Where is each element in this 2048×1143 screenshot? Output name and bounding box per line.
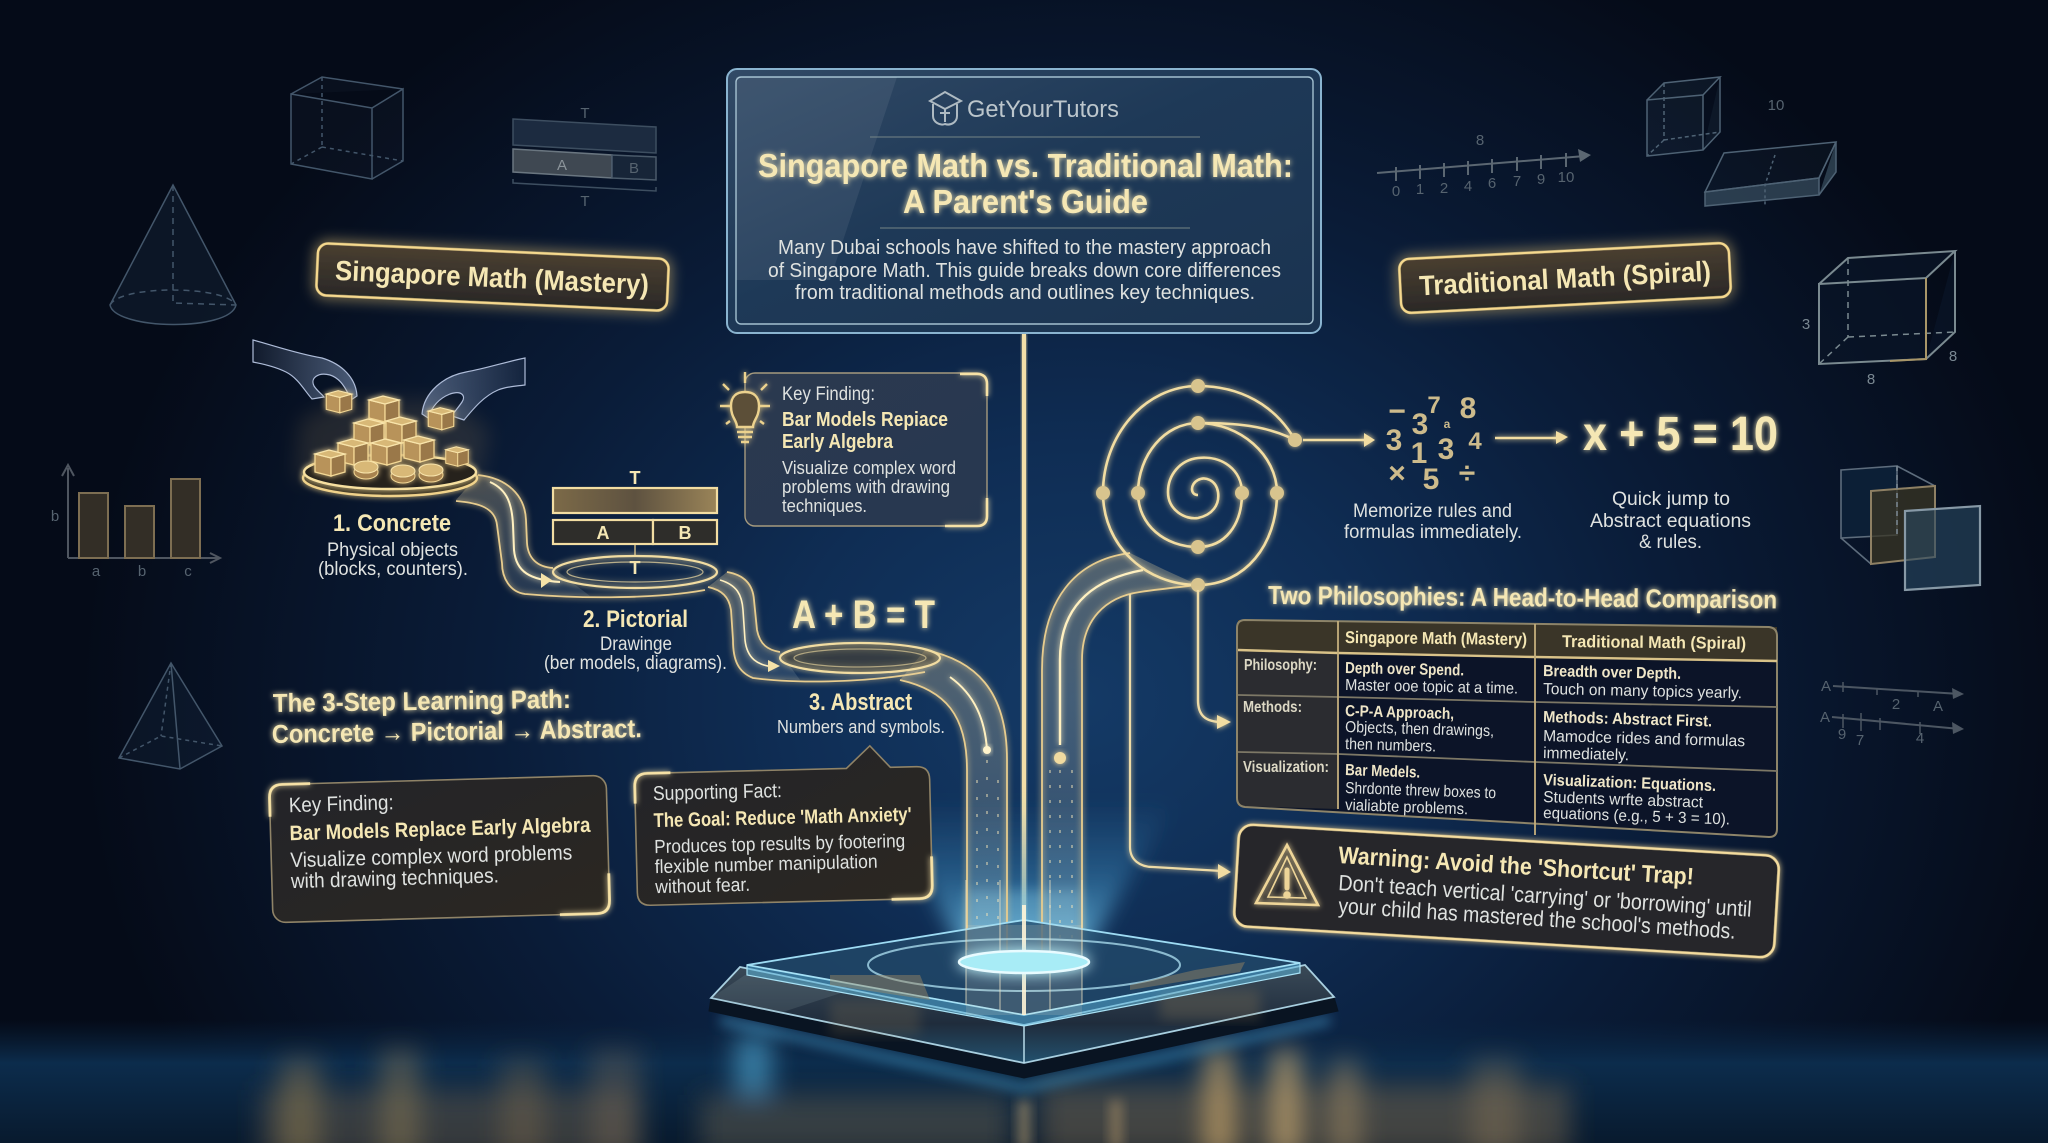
spiral tube	[1042, 553, 1198, 950]
icon: scattered numbers: ×	[1388, 457, 1406, 490]
decoration: big wireframe box right: 3	[1802, 316, 1810, 333]
icon: scattered numbers: 1	[1411, 437, 1427, 470]
table column: Traditional	[1543, 663, 1745, 829]
decoration: number lines right: A	[1820, 709, 1830, 726]
table header: Singapore Math (Mastery)	[1345, 628, 1527, 649]
icon: scattered numbers: a	[1444, 417, 1451, 431]
table column: Singapore: Master ooe topic at a time.	[1345, 677, 1518, 698]
decoration: number lines right	[1820, 678, 1964, 749]
icon: scattered numbers: 4	[1468, 428, 1482, 455]
decoration: big wireframe box right: 8	[1867, 371, 1875, 388]
decoration: number lines right: A	[1933, 698, 1943, 715]
caption: memorize rules: formulas immediately.	[1344, 522, 1522, 543]
decoration: number line: 9	[1537, 171, 1545, 188]
decoration: faint bar model: T	[580, 193, 590, 210]
learning path tube 2	[708, 572, 925, 682]
decoration: faint bar model: T	[580, 105, 590, 122]
caption: quick jump	[1590, 489, 1751, 553]
icon: hands and blocks	[253, 340, 525, 496]
callout: key finding bottom: Key Finding:	[288, 791, 394, 817]
table column: Singapore	[1345, 660, 1518, 818]
decoration: number line: 7	[1513, 173, 1521, 190]
caption: memorize rules: Memorize rules and	[1353, 501, 1512, 522]
label: Traditional Math	[1399, 243, 1731, 313]
logo wordmark: GetYourTutors	[967, 96, 1119, 123]
decoration: number line: 1	[1416, 181, 1424, 198]
table row labels: Methods:	[1243, 699, 1302, 716]
table row labels: Visualization:	[1243, 759, 1329, 776]
step 3: Abstract: 3. Abstract	[809, 689, 912, 716]
disc: pictorial	[553, 556, 717, 588]
decoration: bar chart: b	[51, 508, 59, 525]
warning text: your child has mastered the school's methods.	[1338, 893, 1736, 944]
intro text	[768, 237, 1281, 304]
central stem	[1022, 333, 1026, 973]
step 2: Pictorial: 2. Pictorial	[583, 606, 688, 633]
arrow: rules to equation	[1495, 431, 1568, 444]
heading: 3-step learning path: The 3-Step Learning Path:	[273, 684, 571, 718]
caption: quick jump: & rules.	[1639, 532, 1702, 553]
decoration: number line: 4	[1464, 178, 1472, 195]
warning box	[1233, 824, 1780, 958]
equation: x + 5 = 10: x + 5 = 10	[1583, 408, 1778, 461]
table header: Traditional Math (Spiral)	[1562, 632, 1746, 653]
icon: bar model	[553, 468, 717, 578]
icon: bar model: T	[630, 468, 640, 488]
decoration: pyramid	[119, 663, 222, 769]
table row labels: Philosophy:	[1244, 657, 1317, 674]
platform reflection	[720, 1020, 1330, 1088]
table column: Traditional: equations (e.g., 5 + 3 = 10).	[1543, 805, 1730, 829]
decoration: faint bar model: B	[629, 160, 639, 177]
table column: Traditional: Methods: Abstract First.	[1543, 709, 1712, 730]
disc: abstract	[780, 643, 940, 673]
table column: Traditional: immediately.	[1543, 745, 1629, 764]
caption: quick jump: Abstract equations	[1590, 511, 1751, 532]
decoration: overlapping squares	[1841, 466, 1980, 590]
decoration: number lines right: 7	[1856, 732, 1864, 749]
decoration: number line: 6	[1488, 175, 1496, 192]
icon: scattered numbers: 7	[1427, 392, 1441, 419]
table header	[1345, 628, 1746, 653]
callout: key finding top: Early Algebra	[782, 431, 894, 453]
icon: bar model: A	[596, 523, 610, 543]
icon: scattered numbers: ÷	[1459, 457, 1475, 490]
decoration: number lines right: 2	[1892, 696, 1900, 713]
callout: supporting fact: flexible number manipulation	[654, 852, 878, 878]
step 1: Concrete: (blocks, counters).	[318, 559, 468, 580]
callout: key finding bottom: Bar Models Replace Early Algebra	[289, 814, 591, 845]
decoration: wireframe boxes top right	[1647, 77, 1836, 206]
step 3: Abstract	[777, 689, 945, 737]
arrow: spiral to warning	[1130, 594, 1231, 879]
table column: Singapore: Depth over Spend.	[1345, 660, 1464, 679]
spiral	[1096, 379, 1302, 592]
callout: key finding top: techniques.	[782, 496, 867, 516]
icon: scattered numbers: 3	[1412, 408, 1428, 441]
step 3: Abstract: Numbers and symbols.	[777, 717, 945, 737]
table column: Traditional: Visualization: Equations.	[1543, 772, 1716, 795]
caption: memorize rules	[1344, 501, 1522, 543]
callout: key finding bottom: with drawing techniques.	[290, 864, 499, 893]
icon: light bulb	[720, 372, 770, 442]
icon: scattered numbers: 3	[1438, 433, 1454, 466]
title	[758, 147, 1293, 220]
heading: two philosophies: Two Philosophies: A Head-to-Head Comparison	[1268, 580, 1777, 614]
step 2: Pictorial: Drawinge	[600, 634, 672, 655]
decoration: number lines right: 4	[1916, 730, 1924, 747]
decoration: big wireframe box right: 8	[1949, 348, 1957, 365]
table column: Singapore: Bar Medels.	[1345, 762, 1420, 782]
table row labels	[1243, 657, 1329, 776]
decoration: number lines right: A	[1821, 678, 1831, 695]
learning path tube 3 down to base	[900, 650, 1007, 950]
caption: quick jump: Quick jump to	[1612, 489, 1730, 510]
comparison table	[1237, 620, 1777, 837]
callout: supporting fact	[634, 744, 933, 906]
intro text: Many Dubai schools have shifted to the mastery approach	[778, 237, 1271, 259]
icon: warning triangle	[1256, 845, 1318, 905]
warning text	[1338, 870, 1752, 944]
decoration: number line: 10	[1558, 169, 1574, 186]
label: Traditional Math: Traditional Math (Spiral)	[1418, 256, 1712, 301]
decoration: wireframe box top left	[291, 77, 403, 179]
table column: Singapore: vialiabte problems.	[1345, 797, 1468, 818]
equation: A + B = T: A + B = T	[792, 593, 935, 637]
heading: 3-step learning path: Concrete → Pictorial → Abstract.	[272, 713, 642, 749]
table column: Traditional: Students wrfte abstract	[1543, 789, 1704, 812]
intro text: of Singapore Math. This guide breaks down core differences	[768, 260, 1281, 282]
decoration: big wireframe box right	[1802, 251, 1957, 388]
table column: Traditional: Touch on many topics yearly.	[1543, 681, 1742, 702]
step 2: Pictorial	[544, 606, 727, 674]
decoration: number line	[1377, 132, 1591, 200]
step 1: Concrete: Physical objects	[327, 540, 458, 561]
icon: scattered numbers: 5	[1423, 463, 1439, 496]
title: Singapore Math vs. Traditional Math:	[758, 147, 1293, 184]
label: Singapore Math	[316, 243, 669, 311]
platform base	[709, 880, 1338, 1078]
decoration: bar chart: b	[138, 563, 146, 580]
arrow: spiral to table	[1198, 590, 1231, 729]
callout: supporting fact: The Goal: Reduce 'Math Anxiety'	[653, 804, 912, 832]
icon: scattered numbers: 8	[1460, 392, 1476, 425]
callout: supporting fact: Supporting Fact:	[653, 780, 782, 805]
icon: scattered numbers: 3	[1386, 424, 1402, 457]
callout: supporting fact: without fear.	[654, 875, 750, 898]
title: A Parent's Guide	[903, 183, 1148, 220]
warning text: Don't teach vertical 'carrying' or 'borrowing' until	[1338, 870, 1752, 922]
learning path tube 1	[456, 475, 705, 597]
arrow: spiral to rules	[1303, 433, 1375, 447]
callout: key finding top: Bar Models Repiace	[782, 409, 948, 431]
step 2: Pictorial: (ber models, diagrams).	[544, 653, 727, 674]
decoration: cone	[110, 185, 236, 325]
callout: key finding top: problems with drawing	[782, 477, 950, 497]
callout: key finding bottom	[269, 775, 610, 923]
intro text: from traditional methods and outlines key techniques.	[795, 282, 1255, 304]
table column: Traditional: Breadth over Depth.	[1543, 663, 1681, 683]
label: Singapore Math: Singapore Math (Mastery)	[334, 255, 650, 300]
decoration: bar chart	[51, 465, 220, 580]
warning heading: Warning: Avoid the 'Shortcut' Trap!	[1338, 842, 1695, 891]
decoration: faint bar model	[513, 105, 656, 210]
heading: 3-step learning path	[272, 684, 642, 749]
callout: key finding top	[720, 372, 987, 526]
decoration: bar chart: c	[184, 563, 192, 580]
callout: key finding top: Key Finding:	[782, 384, 875, 405]
light cone from platform	[880, 800, 1175, 970]
decoration: number line: 8	[1476, 132, 1484, 149]
table column: Singapore: Shrdonte threw boxes to	[1345, 780, 1496, 802]
decoration: faint bar model: A	[557, 157, 567, 174]
callout: supporting fact: Produces top results by footering	[654, 831, 905, 858]
table column: Singapore: then numbers.	[1345, 736, 1436, 756]
icon: scattered numbers: −	[1388, 395, 1406, 428]
decoration: bar chart: a	[92, 563, 101, 580]
callout: key finding top: Visualize complex word	[782, 458, 956, 478]
table column: Traditional: Mamodce rides and formulas	[1543, 728, 1745, 750]
panel: header	[727, 69, 1321, 333]
callout: key finding bottom: Visualize complex word problems	[290, 841, 573, 872]
icon: bar model: B	[678, 523, 692, 543]
icon: logo shield	[930, 92, 961, 125]
step 1: Concrete	[318, 510, 468, 580]
table column: Singapore: Objects, then drawings,	[1345, 719, 1494, 740]
icon: bar model: T	[630, 558, 640, 578]
icon: scattered numbers	[1386, 392, 1482, 496]
decoration: number line: 0	[1392, 183, 1400, 200]
decoration: number line: 2	[1440, 180, 1448, 197]
table column: Singapore: C-P-A Approach,	[1345, 703, 1454, 723]
floor reflection	[0, 1020, 2048, 1143]
step 1: Concrete: 1. Concrete	[333, 510, 451, 537]
decoration: number ten: 10	[1768, 97, 1784, 114]
decoration: number lines right: 9	[1838, 726, 1846, 743]
